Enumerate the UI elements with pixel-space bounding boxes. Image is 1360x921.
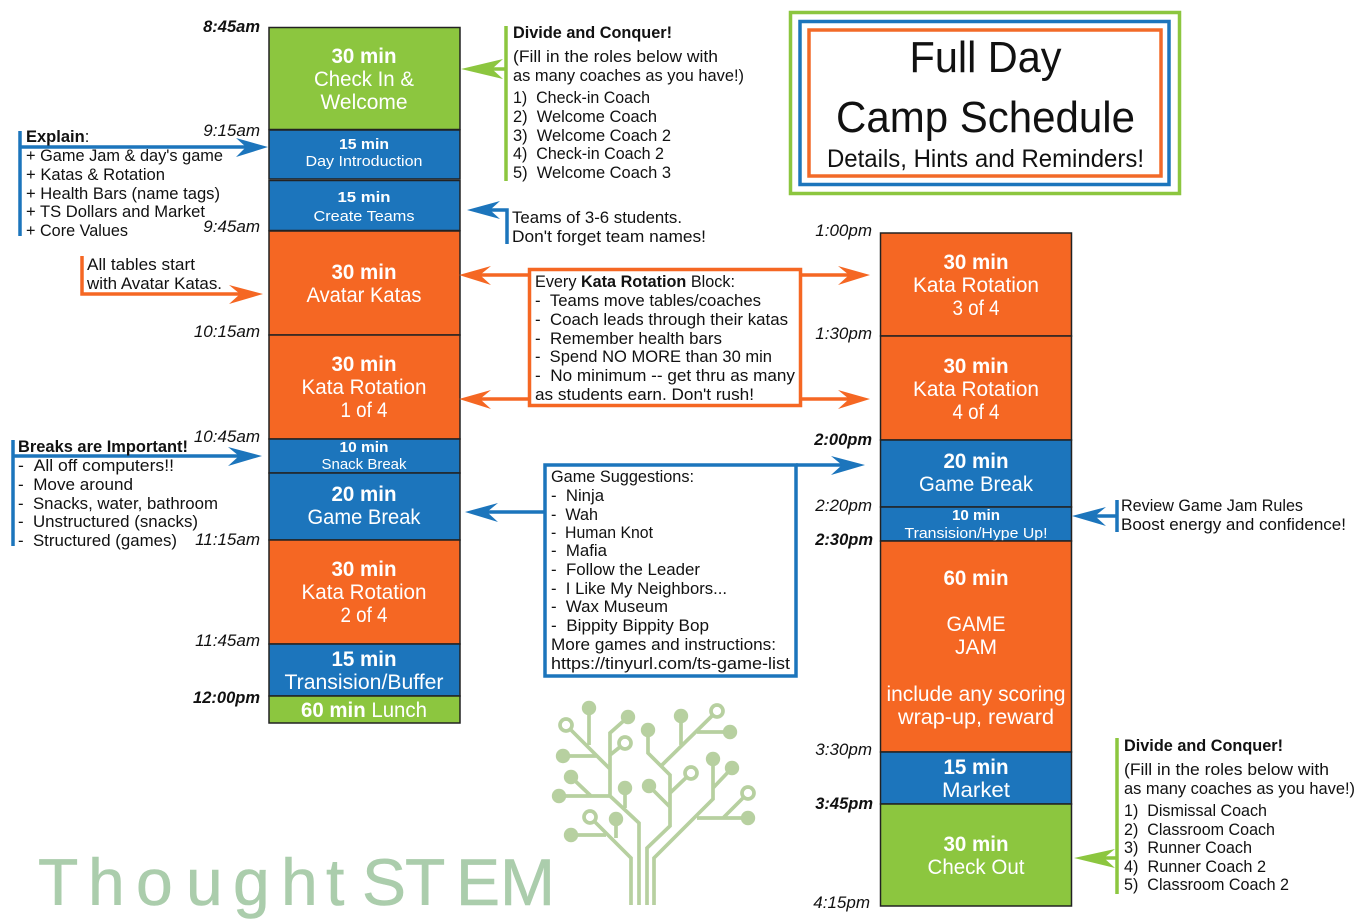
block: game jam: JAM bbox=[955, 636, 997, 659]
arrow: green to check in bbox=[490, 26, 506, 181]
note: divide and conquer morning: 2) Welcome Coach bbox=[513, 108, 657, 126]
note: divide and conquer morning: 4) Check-in Coach 2 bbox=[513, 145, 664, 163]
block: kata rotation 2: 30 min bbox=[332, 558, 396, 581]
block: check out: 30 min bbox=[944, 833, 1008, 856]
note: breaks are important: Breaks are Important! bbox=[18, 438, 188, 456]
callout: game suggestions: - Wax Museum bbox=[551, 598, 668, 616]
block: transition hype up bbox=[880, 507, 1072, 542]
arrows: orange to kata blocks bbox=[459, 266, 870, 409]
note: avatar katas start: All tables start bbox=[87, 256, 195, 274]
time labels: morning: 8:45am bbox=[203, 18, 260, 36]
block: kata rotation 3 bbox=[880, 233, 1072, 336]
note: explain: + Katas & Rotation bbox=[26, 166, 165, 184]
block: kata rotation 3: 30 min bbox=[944, 251, 1008, 274]
callout: every kata rotation block: - Remember health bars bbox=[535, 330, 722, 348]
time labels: afternoon: 3:30pm bbox=[815, 740, 872, 759]
block: transition buffer: 15 min bbox=[332, 648, 396, 671]
callout: game suggestions: - Human Knot bbox=[551, 524, 653, 542]
block: lunch: 60 min Lunch bbox=[301, 699, 427, 722]
note: breaks are important: - Snacks, water, bathroom bbox=[18, 495, 218, 513]
note: divide and conquer afternoon: 4) Runner Coach 2 bbox=[1124, 858, 1266, 876]
block: game jam bbox=[880, 541, 1072, 752]
block: transition buffer bbox=[269, 644, 460, 696]
block: create teams: Create Teams bbox=[314, 208, 414, 225]
block: market bbox=[880, 752, 1072, 804]
block: lunch bbox=[269, 696, 460, 723]
time labels: morning: 12:00pm bbox=[193, 689, 260, 707]
block: day introduction: 15 min bbox=[339, 136, 389, 153]
note: divide and conquer morning: as many coaches as you have!) bbox=[513, 67, 744, 85]
time labels: afternoon: 1:30pm bbox=[815, 324, 872, 343]
note: review game jam rules bbox=[1072, 497, 1346, 534]
note: breaks are important: - Move around bbox=[18, 476, 133, 494]
block: game break: Game Break bbox=[308, 506, 421, 529]
note: divide and conquer afternoon: as many coaches as you have!) bbox=[1124, 780, 1355, 798]
time labels: morning: 11:15am bbox=[195, 530, 260, 549]
arrows: blue to game breaks bbox=[465, 456, 865, 522]
note: breaks are important bbox=[13, 438, 262, 550]
block: kata rotation 3: Kata Rotation bbox=[913, 274, 1039, 297]
block: check out: Check Out bbox=[928, 856, 1025, 879]
block: create teams: 15 min bbox=[338, 189, 390, 206]
note: explain: + Core Values bbox=[26, 222, 128, 240]
block: kata rotation 1: 1 of 4 bbox=[340, 399, 388, 422]
note: teams: Teams of 3-6 students. bbox=[512, 209, 682, 227]
note: review game jam rules: Review Game Jam Rules bbox=[1121, 497, 1303, 515]
left schedule column bbox=[269, 28, 460, 723]
logo wordmark: ThoughtSTEM bbox=[38, 845, 555, 919]
note: teams: Don't forget team names! bbox=[512, 228, 706, 246]
note: teams bbox=[467, 201, 706, 246]
block: transition hype up: 10 min bbox=[952, 507, 1000, 524]
arrow: orange to avatar katas bbox=[82, 256, 240, 294]
note: divide and conquer morning: (Fill in the roles below with bbox=[513, 48, 718, 66]
callout: every kata rotation block: - Coach leads through their katas bbox=[535, 311, 788, 329]
block: game jam: 60 min bbox=[944, 567, 1008, 590]
block: game break: 20 min bbox=[944, 450, 1008, 473]
block: kata rotation 4 bbox=[880, 336, 1072, 440]
block: check out bbox=[880, 804, 1072, 906]
callout: game suggestions: - Follow the Leader bbox=[551, 561, 701, 579]
block: game jam: GAME bbox=[946, 613, 1006, 636]
title panel bbox=[790, 12, 1180, 194]
note: avatar katas start: with Avatar Katas. bbox=[86, 275, 222, 293]
callout: every kata rotation block: - Spend NO MORE than 30 min bbox=[535, 348, 772, 366]
block: market: 15 min bbox=[944, 756, 1008, 779]
block: kata rotation 1: 30 min bbox=[332, 353, 396, 376]
logo tree icon bbox=[552, 701, 755, 905]
callout: every kata rotation block: as students earn. Don't rush! bbox=[535, 386, 754, 404]
callout: every kata rotation block: - No minimum -- get thru as many bbox=[535, 367, 796, 385]
note: explain: + Health Bars (name tags) bbox=[26, 185, 220, 203]
block: avatar katas: Avatar Katas bbox=[306, 284, 422, 307]
note: explain: + Game Jam & day's game bbox=[26, 147, 223, 165]
callout: game suggestions: - Bippity Bippity Bop bbox=[551, 617, 709, 635]
block: game break: 20 min bbox=[332, 483, 396, 506]
time labels: afternoon: 2:20pm bbox=[814, 496, 872, 515]
block: kata rotation 2: 2 of 4 bbox=[340, 604, 388, 627]
block: day introduction: Day Introduction bbox=[306, 153, 422, 170]
note: divide and conquer morning bbox=[461, 24, 744, 182]
time labels: morning: 9:15am bbox=[203, 121, 260, 140]
block: check in: 30 min bbox=[332, 45, 396, 68]
time labels: morning: 10:45am bbox=[194, 427, 260, 446]
note: breaks are important: - Unstructured (snacks) bbox=[18, 513, 198, 531]
callout: game suggestions: - Wah bbox=[551, 506, 598, 524]
note: explain: Explain: bbox=[26, 128, 89, 146]
block: kata rotation 4: 30 min bbox=[944, 355, 1008, 378]
block: transition buffer: Transision/Buffer bbox=[284, 671, 444, 694]
time labels: morning: 11:45am bbox=[195, 631, 260, 650]
time labels: afternoon: 2:30pm bbox=[814, 531, 873, 549]
title panel: Full Day bbox=[910, 33, 1062, 82]
callout: game suggestions: https://tinyurl.com/ts-game-list bbox=[551, 655, 790, 673]
block: snack break: 10 min bbox=[340, 439, 388, 456]
note: breaks are important: - All off computers!! bbox=[18, 457, 174, 475]
callout: game suggestions: - I Like My Neighbors... bbox=[551, 580, 727, 598]
time labels: morning: 9:45am bbox=[203, 217, 260, 236]
title panel: Camp Schedule bbox=[836, 93, 1135, 142]
title panel: Details, Hints and Reminders! bbox=[827, 145, 1144, 173]
note: divide and conquer morning: 5) Welcome Coach 3 bbox=[513, 164, 671, 182]
block: create teams bbox=[269, 180, 460, 230]
arrow: blue to hype up bbox=[1094, 500, 1117, 532]
block: game break bbox=[880, 440, 1072, 507]
note: divide and conquer morning: Divide and Conquer! bbox=[513, 24, 672, 42]
note: explain: + TS Dollars and Market bbox=[26, 203, 205, 221]
block: game jam: wrap-up, reward bbox=[897, 706, 1054, 729]
note: divide and conquer morning: 1) Check-in Coach bbox=[513, 89, 650, 107]
block: kata rotation 3: 3 of 4 bbox=[952, 297, 1000, 320]
time labels: afternoon: 4:15pm bbox=[813, 893, 870, 912]
block: kata rotation 1: Kata Rotation bbox=[302, 376, 426, 399]
note: divide and conquer afternoon: 3) Runner Coach bbox=[1124, 839, 1252, 857]
note: divide and conquer afternoon bbox=[1074, 737, 1355, 894]
time labels: afternoon bbox=[813, 221, 873, 912]
note: divide and conquer afternoon: 2) Classroom Coach bbox=[1124, 821, 1275, 839]
block: avatar katas bbox=[269, 231, 460, 335]
block: market: Market bbox=[942, 779, 1010, 802]
block: check in: Check In & bbox=[314, 68, 414, 91]
time labels: morning bbox=[193, 18, 260, 707]
block: game jam: include any scoring bbox=[886, 683, 1066, 706]
block: kata rotation 2: Kata Rotation bbox=[302, 581, 426, 604]
note: review game jam rules: Boost energy and confidence! bbox=[1121, 516, 1346, 534]
block: check in bbox=[269, 28, 460, 130]
note: divide and conquer afternoon: (Fill in the roles below with bbox=[1124, 761, 1329, 779]
block: avatar katas: 30 min bbox=[332, 261, 396, 284]
callout: game suggestions: Game Suggestions: bbox=[551, 468, 694, 486]
callout: every kata rotation block: - Teams move tables/coaches bbox=[535, 292, 761, 310]
time labels: afternoon: 3:45pm bbox=[815, 795, 873, 813]
arrow: green to check out bbox=[1096, 738, 1117, 894]
block: snack break bbox=[269, 439, 460, 473]
block: kata rotation 4: Kata Rotation bbox=[913, 378, 1039, 401]
arrow: blue to day introduction bbox=[20, 131, 246, 236]
callout: game suggestions: - Ninja bbox=[551, 487, 605, 505]
callout: game suggestions bbox=[465, 456, 865, 676]
block: game break bbox=[269, 473, 460, 540]
callout: game suggestions: - Mafia bbox=[551, 542, 608, 560]
note: divide and conquer afternoon: Divide and Conquer! bbox=[1124, 737, 1283, 755]
arrow: blue to create teams bbox=[490, 210, 507, 244]
block: transition hype up: Transision/Hype Up! bbox=[904, 525, 1048, 542]
note: divide and conquer afternoon: 5) Classroom Coach 2 bbox=[1124, 876, 1289, 894]
note: avatar katas start bbox=[82, 256, 263, 304]
arrow: blue to snack break bbox=[13, 440, 240, 546]
note: explain bbox=[20, 128, 268, 240]
time labels: afternoon: 1:00pm bbox=[815, 221, 872, 240]
note: divide and conquer morning: 3) Welcome Coach 2 bbox=[513, 127, 671, 145]
block: kata rotation 2 bbox=[269, 540, 460, 644]
right schedule column bbox=[880, 233, 1072, 906]
time labels: morning: 10:15am bbox=[194, 322, 260, 341]
block: day introduction bbox=[269, 130, 460, 179]
block: snack break: Snack Break bbox=[322, 456, 407, 473]
callout: every kata rotation block bbox=[459, 266, 870, 409]
block: game break: Game Break bbox=[919, 473, 1033, 496]
callout: game suggestions: More games and instructions: bbox=[551, 636, 776, 654]
time labels: afternoon: 2:00pm bbox=[813, 431, 872, 449]
note: divide and conquer afternoon: 1) Dismissal Coach bbox=[1124, 802, 1267, 820]
block: kata rotation 1 bbox=[269, 335, 460, 439]
block: check in: Welcome bbox=[320, 91, 408, 114]
note: breaks are important: - Structured (games) bbox=[18, 532, 177, 550]
callout: every kata rotation block: Every Kata Rotation Block: bbox=[535, 273, 735, 291]
block: kata rotation 4: 4 of 4 bbox=[952, 401, 1000, 424]
